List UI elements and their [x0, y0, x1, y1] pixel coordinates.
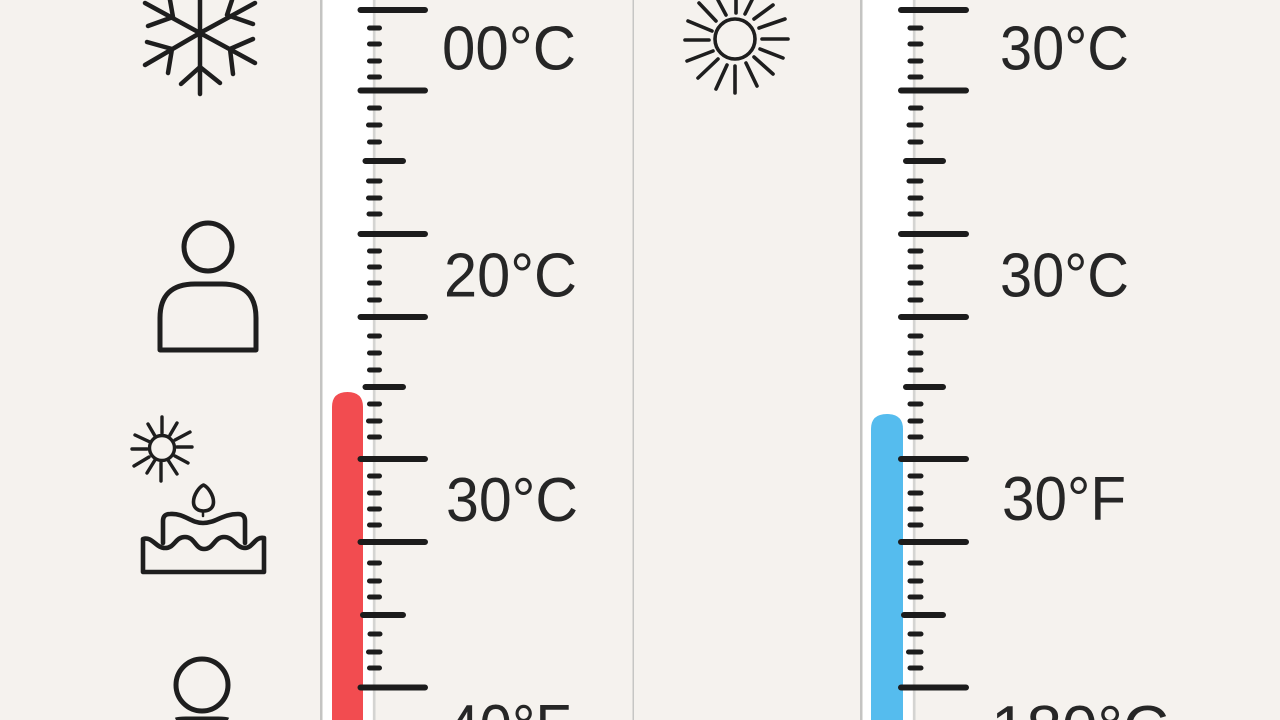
icon: snowflake: [145, 0, 255, 94]
icon: person lower: [176, 659, 228, 720]
icon: birthday cake: [143, 485, 264, 572]
right scale labels: 30°C: [1000, 242, 1129, 310]
left scale labels: 00°C: [442, 14, 576, 84]
left mercury fill red: [332, 392, 363, 720]
centre divider: [632, 0, 634, 720]
icon: large sun: [685, 0, 788, 93]
left thermometer tube: [320, 0, 376, 720]
left thermometer: [320, 0, 425, 720]
left scale labels: [442, 14, 578, 720]
icon: person upper: [160, 223, 256, 350]
right scale labels: [991, 14, 1169, 720]
right scale labels: 30°C: [1000, 14, 1129, 84]
right mercury fill blue: [871, 414, 903, 720]
right scale labels: 30°F: [1002, 465, 1126, 534]
right thermometer: [860, 0, 966, 720]
left scale labels: 20°C: [444, 242, 577, 310]
left scale labels: 30°C: [446, 466, 578, 535]
left scale ticks: [360, 10, 425, 688]
right thermometer tube: [860, 0, 916, 720]
icon: small sun: [132, 417, 192, 481]
right scale ticks: [901, 10, 966, 688]
